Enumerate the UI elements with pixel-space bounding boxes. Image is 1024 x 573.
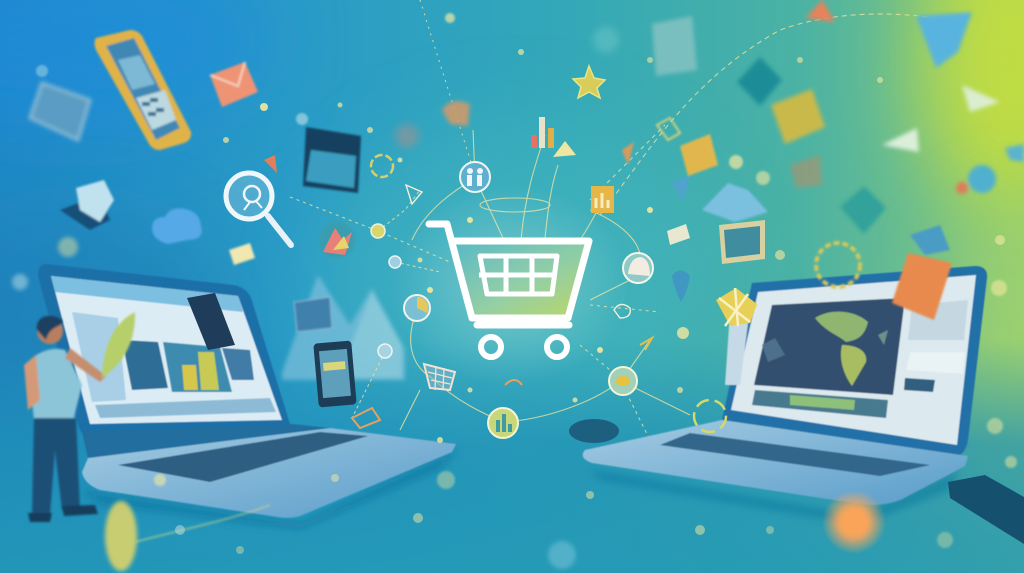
icon: gear outline	[816, 243, 860, 287]
laptop shadow	[80, 448, 460, 530]
laptop screen	[51, 276, 282, 424]
icon: folders top right of cart	[622, 118, 718, 202]
bokeh: orange glow	[822, 490, 886, 554]
keyboard	[118, 432, 368, 482]
laptop base	[583, 420, 968, 505]
tile: red chart	[790, 155, 822, 188]
icon: map pin	[672, 270, 690, 302]
small sketched icons around cart	[352, 185, 726, 432]
icon: dome	[442, 101, 470, 126]
icon: ring gear	[371, 155, 393, 177]
icon: small folder	[667, 224, 690, 245]
icon: envelope top	[210, 62, 258, 107]
torso	[28, 349, 82, 425]
laptop: right	[583, 266, 987, 525]
map toolbar	[752, 390, 888, 418]
icon: blue wifi tag	[910, 225, 950, 255]
icon: bar chart node	[488, 408, 518, 438]
icon: smartphone top left	[94, 30, 191, 150]
tile: red triangle	[806, 0, 835, 22]
tile: lock	[652, 16, 697, 76]
tile: yellow folder	[771, 89, 825, 144]
laptop lid	[38, 264, 290, 436]
icon: gem left	[60, 180, 114, 230]
tile: blue gem	[916, 12, 972, 68]
wheels	[481, 337, 501, 357]
figure: person at left	[24, 312, 135, 522]
icon: mail mountain	[702, 183, 768, 222]
blurred tiles: upper right	[652, 0, 1024, 234]
icon: sunburst tile	[716, 288, 757, 326]
laptop shadow	[590, 470, 960, 525]
icon: cloud	[152, 208, 202, 244]
node: white dots on left	[371, 224, 401, 358]
glow behind cart	[390, 185, 630, 385]
icon: pie node	[404, 295, 430, 321]
icon: people node	[460, 162, 490, 192]
main shopping cart icon	[429, 224, 589, 357]
icon: yellow node	[609, 367, 637, 395]
head	[37, 318, 63, 344]
icon: bell node	[623, 253, 653, 283]
cart frame	[429, 224, 589, 318]
icon: paint chart circle	[319, 222, 355, 258]
icon: small phone	[313, 340, 357, 408]
connection lines	[290, 0, 950, 440]
tile: blue orb	[968, 165, 996, 193]
held leaf chart	[102, 312, 135, 378]
icon: dashboard card	[303, 127, 361, 193]
legs	[32, 418, 80, 515]
tile: plane	[882, 128, 919, 152]
keyboard	[660, 433, 930, 476]
laptop base	[82, 428, 456, 518]
laptop screen	[731, 275, 976, 445]
icon: small orange flags	[264, 155, 277, 173]
icon: picture frame	[719, 220, 765, 264]
icon: magnifying glass	[226, 173, 291, 245]
notebook lower right	[948, 475, 1024, 544]
arm	[65, 348, 106, 382]
icon: orange box	[892, 253, 952, 320]
tile: teal gem	[840, 186, 886, 234]
bokeh: yellow lozenge with trail	[105, 501, 270, 571]
icon: blurred card top left	[30, 83, 90, 140]
icon: star	[573, 66, 605, 98]
icon: small basket	[424, 364, 455, 390]
dark mouse object	[569, 419, 619, 443]
icon: bars top centre	[531, 117, 576, 157]
icon: chart tile	[591, 186, 614, 213]
cart grid	[479, 256, 557, 294]
cart basket fill	[450, 241, 588, 318]
tile: white paper	[962, 85, 1000, 112]
tile: blue right edge	[1005, 144, 1024, 162]
decorative mountains	[282, 275, 405, 380]
icon: phone on laptop	[187, 293, 235, 350]
laptop: left	[38, 264, 460, 530]
icon: sticky note	[229, 243, 255, 265]
laptop lid	[722, 266, 987, 456]
icon: document card	[294, 297, 332, 332]
tile: green diamond	[737, 57, 782, 106]
cart lower bar	[477, 322, 569, 328]
map panel	[754, 298, 905, 395]
